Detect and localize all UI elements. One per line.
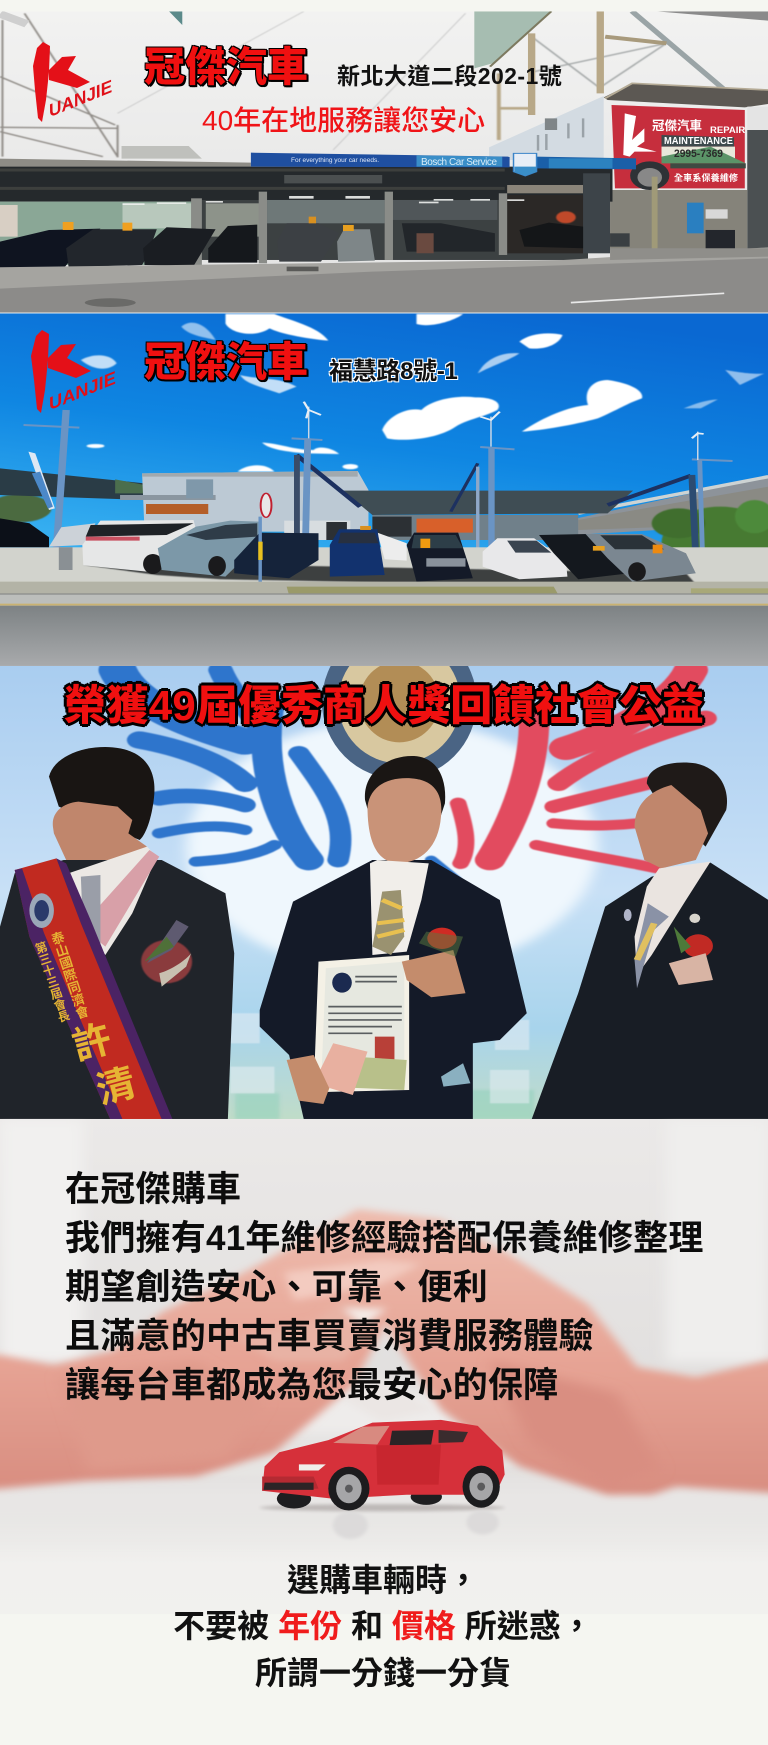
sash lettering: 泰山國際同濟會 (48, 929, 91, 1022)
sash lettering (32, 929, 140, 1113)
closing message: 不要被 年份 和 價格 所迷惑， (173, 1608, 593, 1644)
logo: Kuanjie on showroom two (31, 330, 118, 414)
address: Xinbei Avenue: 新北大道二段202-1號 (337, 63, 562, 89)
text block: buying at Kuanjie (65, 1170, 704, 1405)
sash lettering: 第三十三屆會長 (32, 938, 72, 1025)
figure: man in the centre holding certificate (260, 756, 527, 1119)
text block: buying at Kuanjie: 在冠傑購車 (65, 1170, 241, 1209)
sash lettering: 許 (68, 1018, 116, 1069)
sign text on the shop front: MAINTENANCE (664, 136, 733, 147)
panel: hands protecting a red car (0, 1118, 768, 1554)
logo: Kuanjie on showroom one (33, 42, 114, 122)
closing message: 所謂一分錢一分貨 (255, 1655, 511, 1691)
sign text on the shop front: Bosch Car Service (421, 157, 497, 168)
logo: Kuanjie on showroom one: UANJIE (47, 76, 114, 121)
text block: buying at Kuanjie: 我們擁有41年維修經驗搭配保養維修整理 (65, 1219, 704, 1258)
panel: excellent merchant award photo (0, 624, 768, 1119)
heading: award and community giving: 榮獲49屆優秀商人獎回饋社會公益 (64, 682, 704, 729)
figure: man on the left with sash (0, 747, 234, 1119)
sign text on the shop front: 冠傑汽車 (652, 118, 702, 133)
panel: Fuhui Road lot photo (0, 313, 768, 666)
address: Fuhui Road: 福慧路8號-1 (329, 358, 458, 385)
text block: buying at Kuanjie: 讓每台車都成為您最安心的保障 (65, 1366, 559, 1405)
sign text on the shop front (291, 118, 745, 183)
text block: buying at Kuanjie: 且滿意的中古車買賣消費服務體驗 (65, 1317, 594, 1356)
logo: Kuanjie on showroom two: UANJIE (47, 367, 118, 414)
icon: red toy car (262, 1420, 505, 1511)
figure: man on the right (532, 762, 768, 1119)
closing message: 選購車輛時， (287, 1562, 479, 1598)
sign text on the shop front: REPAIR (710, 125, 745, 136)
sign text on the shop front: For everything your car needs. (291, 157, 379, 164)
sash lettering: 清 (92, 1062, 140, 1113)
sign text on the shop front: 全車系保養維修 (674, 172, 738, 183)
title: brand name, showroom two: 冠傑汽車 (144, 339, 308, 385)
closing message (173, 1562, 593, 1691)
panel: Xinbei Avenue showroom photo (0, 11, 768, 313)
text block: buying at Kuanjie: 期望創造安心、可靠、便利 (65, 1268, 488, 1307)
slogan: 40 years of local service: 40年在地服務讓您安心 (202, 105, 485, 136)
sign text on the shop front: 2995-7369 (674, 148, 723, 160)
title: brand name, showroom one: 冠傑汽車 (144, 44, 308, 90)
